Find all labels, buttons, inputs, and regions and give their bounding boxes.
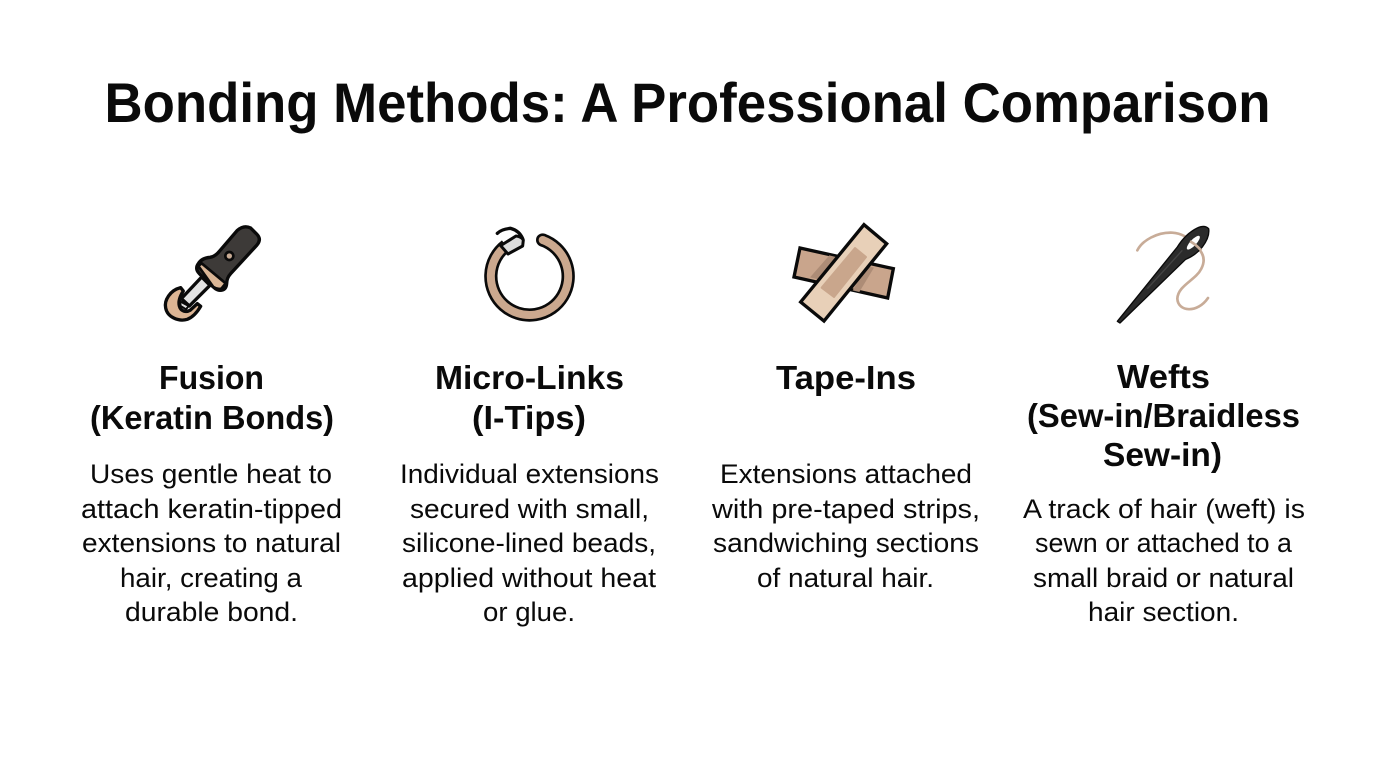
icon: micro-link ring: [491, 228, 568, 315]
text: tape-ins description: Extensions attached: [720, 459, 972, 489]
text: fusion description: Uses gentle heat to: [90, 459, 332, 489]
heading: wefts: Sew-in): [1103, 436, 1222, 473]
heading: micro-links: Micro-Links: [435, 359, 624, 396]
text: wefts description: sewn or attached to a: [1035, 528, 1292, 558]
heading: fusion: [90, 359, 334, 436]
text: micro-links description: [400, 459, 659, 627]
heading: tape-ins: Tape-Ins: [776, 359, 916, 396]
text: micro-links description: or glue.: [483, 597, 575, 627]
text: tape-ins description: [711, 459, 980, 593]
text: wefts description: A track of hair (weft) is: [1023, 494, 1305, 524]
heading: wefts: Wefts: [1117, 358, 1210, 395]
heading: fusion: Fusion: [159, 359, 264, 396]
text: wefts description: small braid or natural: [1033, 563, 1294, 593]
text: fusion description: attach keratin-tipped: [81, 494, 342, 524]
heading: wefts: (Sew-in/Braidless: [1027, 397, 1300, 434]
panel: tape-ins: [711, 225, 980, 593]
panel: fusion: [81, 227, 342, 627]
text: fusion description: [81, 459, 342, 627]
text: tape-ins description: sandwiching sections: [713, 528, 979, 558]
text: micro-links description: applied without heat: [402, 563, 657, 593]
heading: fusion: (Keratin Bonds): [90, 399, 334, 436]
icon: fusion heat tool: [165, 227, 259, 320]
text: tape-ins description: with pre-taped strips,: [711, 494, 980, 524]
text: wefts description: [1023, 494, 1305, 627]
panel: micro-links: [400, 228, 659, 627]
icon: crossed tape strips: [794, 225, 893, 321]
text: fusion description: durable bond.: [125, 597, 298, 627]
text: fusion description: extensions to natural: [82, 528, 341, 558]
title: Bonding Methods: A Professional Comparison: [104, 71, 1270, 134]
heading: wefts: [1027, 358, 1300, 473]
text: fusion description: hair, creating a: [120, 563, 302, 593]
text: micro-links description: secured with small,: [410, 494, 649, 524]
text: tape-ins description: of natural hair.: [757, 563, 934, 593]
panel: wefts: [1023, 226, 1305, 627]
text: micro-links description: silicone-lined beads,: [402, 528, 656, 558]
text: micro-links description: Individual extensions: [400, 459, 659, 489]
icon: needle and thread: [1117, 226, 1209, 323]
heading: micro-links: [435, 359, 624, 436]
heading: micro-links: (I-Tips): [472, 399, 586, 436]
text: wefts description: hair section.: [1088, 597, 1239, 627]
